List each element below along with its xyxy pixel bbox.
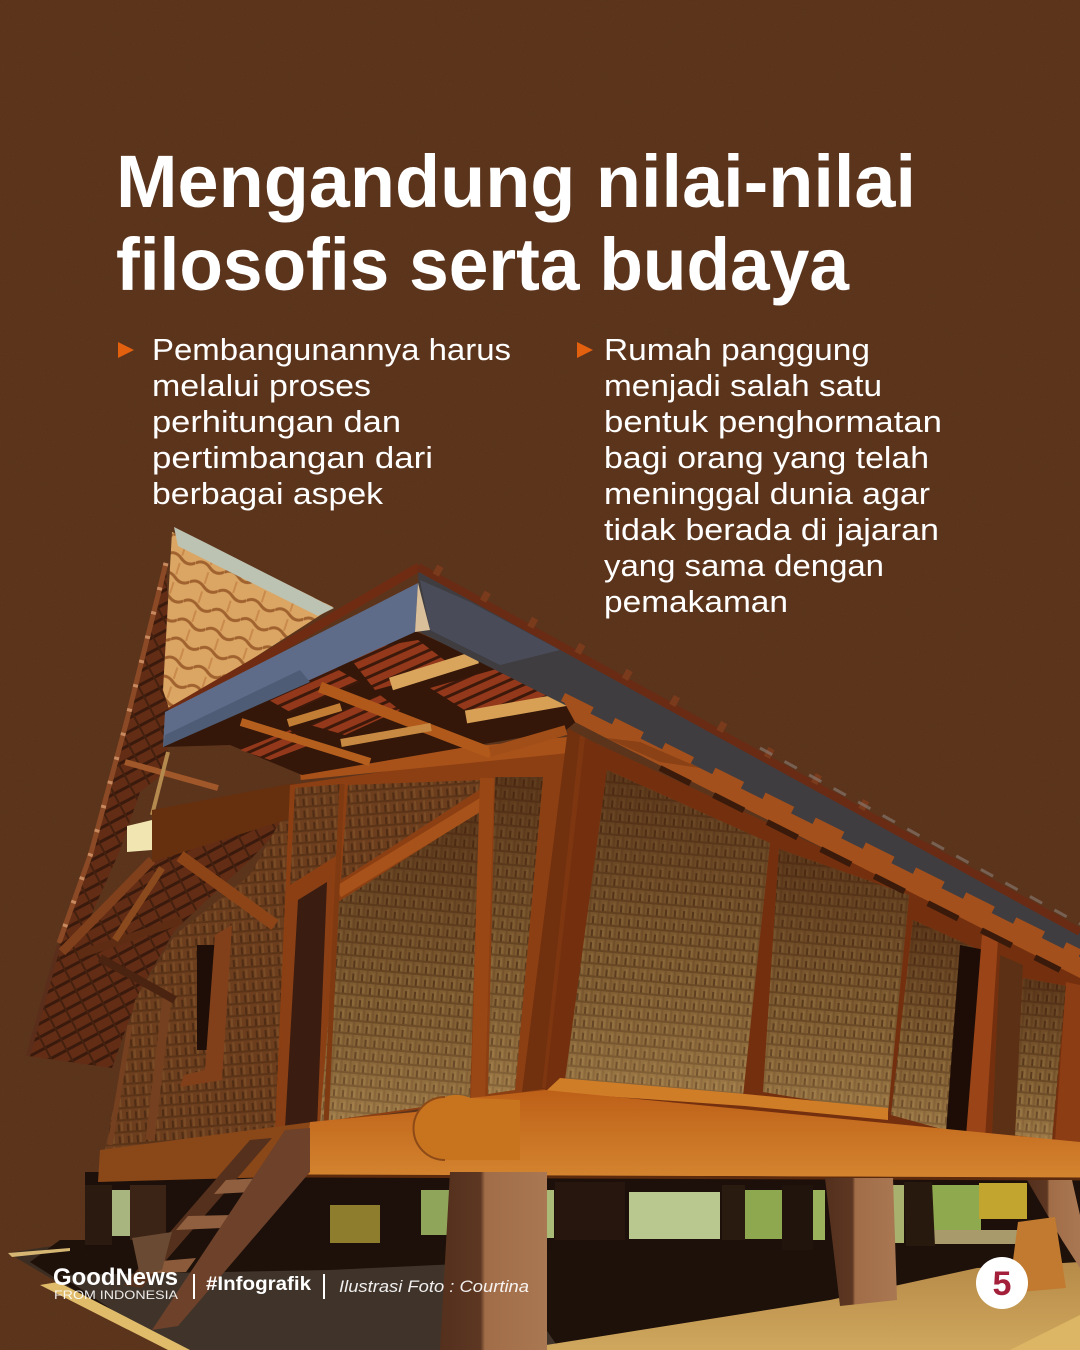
page number badge bbox=[976, 1257, 1028, 1309]
ground under the house bbox=[8, 1240, 1080, 1350]
left overhang beam and braces bbox=[78, 783, 295, 1000]
photo: stilted traditional house bbox=[8, 527, 1080, 1350]
upper gable tiles bbox=[163, 527, 334, 712]
woven wall panels bbox=[565, 770, 1066, 1140]
bullet text: right column: yang sama dengan bbox=[604, 548, 884, 583]
dark underfloor with garden gaps bbox=[85, 1172, 1080, 1250]
lower left roof bbox=[28, 818, 290, 1068]
wooden stairs bbox=[124, 1128, 310, 1330]
concrete stilts and rock bbox=[440, 1172, 1080, 1350]
blue-grey front fascia bbox=[163, 583, 430, 747]
bullet text: right column: menjadi salah satu bbox=[604, 368, 882, 403]
bullet text: right column: meninggal dunia agar bbox=[604, 476, 930, 511]
bullet text: right column bbox=[577, 332, 942, 619]
icon: orange arrow bullet bbox=[577, 342, 593, 358]
title: Mengandung nilai-nilai bbox=[116, 140, 916, 223]
bullet text: right column: pemakaman bbox=[604, 584, 788, 619]
front wall bbox=[275, 728, 612, 1132]
bullet text: left column: Pembangunannya harus bbox=[152, 332, 511, 367]
floor beam with scroll end bbox=[98, 1090, 1080, 1182]
bullet text: right column: Rumah panggung bbox=[604, 332, 870, 367]
page number badge: 5 bbox=[993, 1265, 1011, 1303]
right long wall bbox=[545, 738, 1080, 1145]
footer: logo, hashtag and photo credit bbox=[53, 1264, 529, 1302]
front roof soffit bbox=[163, 630, 590, 775]
bullet text: left column bbox=[118, 332, 511, 511]
roof ridge and ridge tiles bbox=[170, 567, 1080, 932]
logo: GoodNews from Indonesia: GoodNews bbox=[53, 1264, 178, 1291]
bullet text: right column: bentuk penghormatan bbox=[604, 404, 942, 439]
title bbox=[116, 140, 916, 306]
logo: GoodNews from Indonesia: FROM INDONESIA bbox=[54, 1288, 178, 1302]
hashtag: #Infografik bbox=[206, 1274, 311, 1295]
back roof slope bbox=[59, 563, 218, 950]
bullet text: left column: perhitungan dan bbox=[152, 404, 401, 439]
bullet text: right column: tidak berada di jajaran bbox=[604, 512, 939, 547]
long eave: grey band and fascia bbox=[418, 567, 1080, 978]
left side wall bbox=[105, 800, 292, 1150]
bullet text: left column: melalui proses bbox=[152, 368, 371, 403]
icon: orange arrow bullet bbox=[118, 342, 134, 358]
bullet text: left column: berbagai aspek bbox=[152, 476, 384, 511]
bullet text: right column: bagi orang yang telah bbox=[604, 440, 929, 475]
bullet text: left column: pertimbangan dari bbox=[152, 440, 433, 475]
photo credit: Ilustrasi Foto : Courtina bbox=[339, 1277, 529, 1296]
title: filosofis serta budaya bbox=[116, 223, 850, 306]
